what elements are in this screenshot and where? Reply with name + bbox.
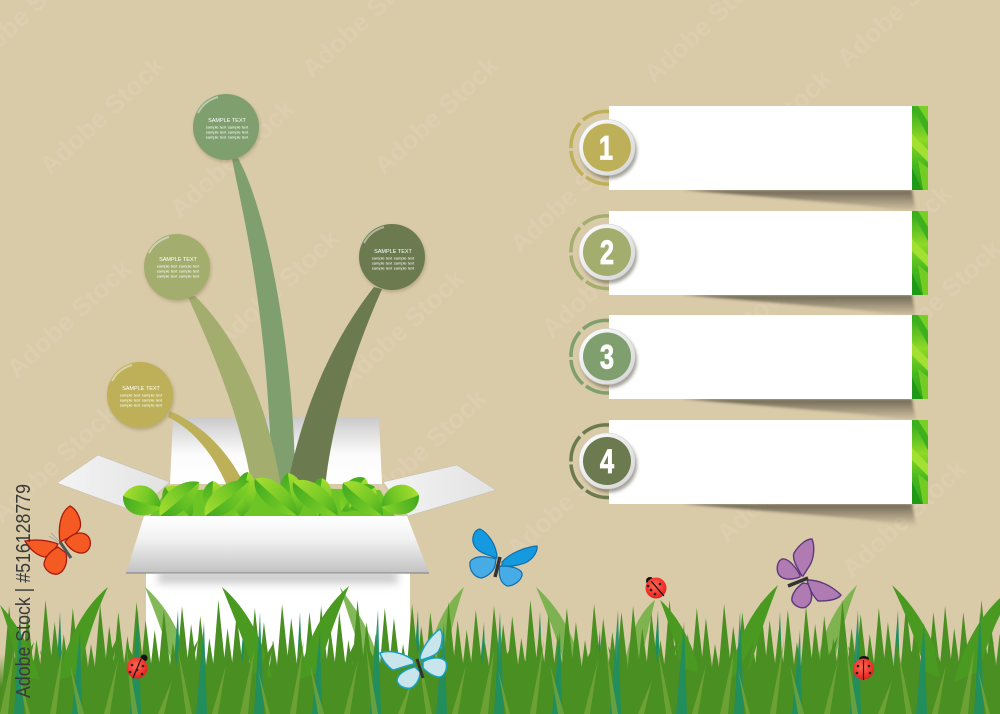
ring segments	[571, 111, 609, 184]
bubble: top: sample text	[206, 130, 227, 134]
number badge 2: 2	[600, 234, 614, 272]
bubble: left	[144, 234, 211, 302]
bubble: top: sample text	[228, 124, 249, 130]
stock watermark pattern: Adobe Stock	[164, 93, 301, 224]
bubble: bottom left: sample text	[142, 402, 163, 408]
ring segments	[571, 216, 609, 289]
stock watermark pattern: Adobe Stock	[701, 63, 838, 194]
stock watermark pattern: Adobe Stock	[368, 50, 505, 181]
bubble: bottom left: sample text	[142, 392, 163, 398]
stock watermark pattern: Adobe Stock	[334, 263, 471, 394]
plant stems	[168, 158, 382, 488]
bubble: left: sample text	[157, 274, 178, 278]
card 3	[571, 315, 928, 421]
ladybug: left	[126, 654, 148, 678]
number badge 4	[579, 433, 637, 492]
bubble: top: SAMPLE TEXT	[208, 118, 247, 124]
bubble: top: sample text	[228, 130, 249, 134]
stock watermark pattern: Adobe Stock	[821, 178, 958, 309]
bubble: right	[359, 224, 426, 292]
bubble: top	[193, 94, 260, 162]
number badge 3	[579, 328, 637, 388]
stock watermark pattern: Adobe Stock	[501, 433, 638, 564]
butterfly: light blue	[380, 629, 447, 688]
stem 2	[188, 296, 281, 488]
bubble: bottom left: sample text	[120, 398, 141, 402]
leaves in box	[123, 472, 420, 516]
butterfly: blue	[470, 529, 537, 586]
stock watermark pattern: Adobe Stock	[836, 453, 973, 584]
stock watermark pattern: Adobe Stock	[661, 273, 798, 404]
bubble: bottom left: sample text	[120, 402, 141, 408]
stock watermark pattern: Adobe Stock	[151, 458, 288, 589]
bubble: left: sample text	[179, 264, 200, 268]
vertical stock label: Adobe Stock | #516128779	[13, 484, 35, 698]
box body	[146, 570, 410, 693]
number badge 1	[579, 120, 637, 179]
bubble: bottom left: sample text	[142, 398, 163, 402]
stock watermark pattern: Adobe Stock	[711, 418, 848, 549]
bubble: right: sample text	[394, 260, 415, 266]
bubble: right: SAMPLE TEXT	[374, 249, 413, 255]
bubble: left: sample text	[179, 268, 200, 274]
stock watermark pattern: Adobe Stock	[1, 253, 138, 384]
ring segments	[571, 425, 609, 498]
stock watermark pattern: Adobe Stock	[504, 128, 641, 259]
grass	[0, 585, 1000, 714]
ladybug: right	[853, 656, 874, 680]
number badge 3: 3	[600, 339, 614, 376]
card 1	[571, 106, 928, 212]
stock watermark pattern: Adobe Stock	[209, 223, 346, 354]
bubble: bottom left: sample text	[120, 392, 141, 398]
big dark blades	[0, 585, 1000, 682]
number badge 2	[579, 224, 637, 284]
base of the grass	[0, 655, 1000, 714]
stock watermark pattern: Adobe Stock	[536, 213, 673, 344]
bubble: top: sample text	[206, 134, 227, 140]
box left flap	[57, 455, 170, 512]
bubble: bottom left: SAMPLE TEXT	[122, 386, 161, 392]
bubble: right: sample text	[394, 266, 415, 270]
box front flap	[126, 516, 429, 573]
bubble: bottom left	[107, 362, 174, 430]
stem 4	[168, 411, 243, 486]
stock watermark pattern: Adobe Stock	[356, 383, 493, 514]
bubble: right: sample text	[372, 260, 393, 266]
card 2	[571, 211, 928, 317]
butterfly: purple	[777, 539, 841, 608]
bubble: left: sample text	[179, 274, 200, 278]
number badge 4: 4	[600, 443, 614, 481]
box right flap	[383, 465, 496, 516]
stem 1	[232, 158, 295, 488]
bubble: right: sample text	[394, 256, 415, 260]
big light blades	[145, 585, 857, 668]
ring segments	[571, 320, 609, 393]
bubble: left: sample text	[157, 264, 178, 268]
box back flap	[170, 417, 382, 484]
card 4	[571, 420, 928, 526]
stem 3	[287, 287, 382, 488]
bubble: right: sample text	[372, 256, 393, 260]
stock watermark pattern: Adobe Stock	[34, 50, 171, 181]
bubble: right: sample text	[372, 266, 393, 270]
bubble: top: sample text	[228, 134, 249, 140]
open box	[57, 417, 496, 693]
butterfly: orange	[25, 506, 90, 574]
ladybug: middle	[646, 577, 666, 598]
number badge 1: 1	[599, 130, 613, 167]
bubble: left: SAMPLE TEXT	[159, 257, 198, 263]
bubble: left: sample text	[157, 268, 178, 274]
bubble: top: sample text	[206, 124, 227, 130]
